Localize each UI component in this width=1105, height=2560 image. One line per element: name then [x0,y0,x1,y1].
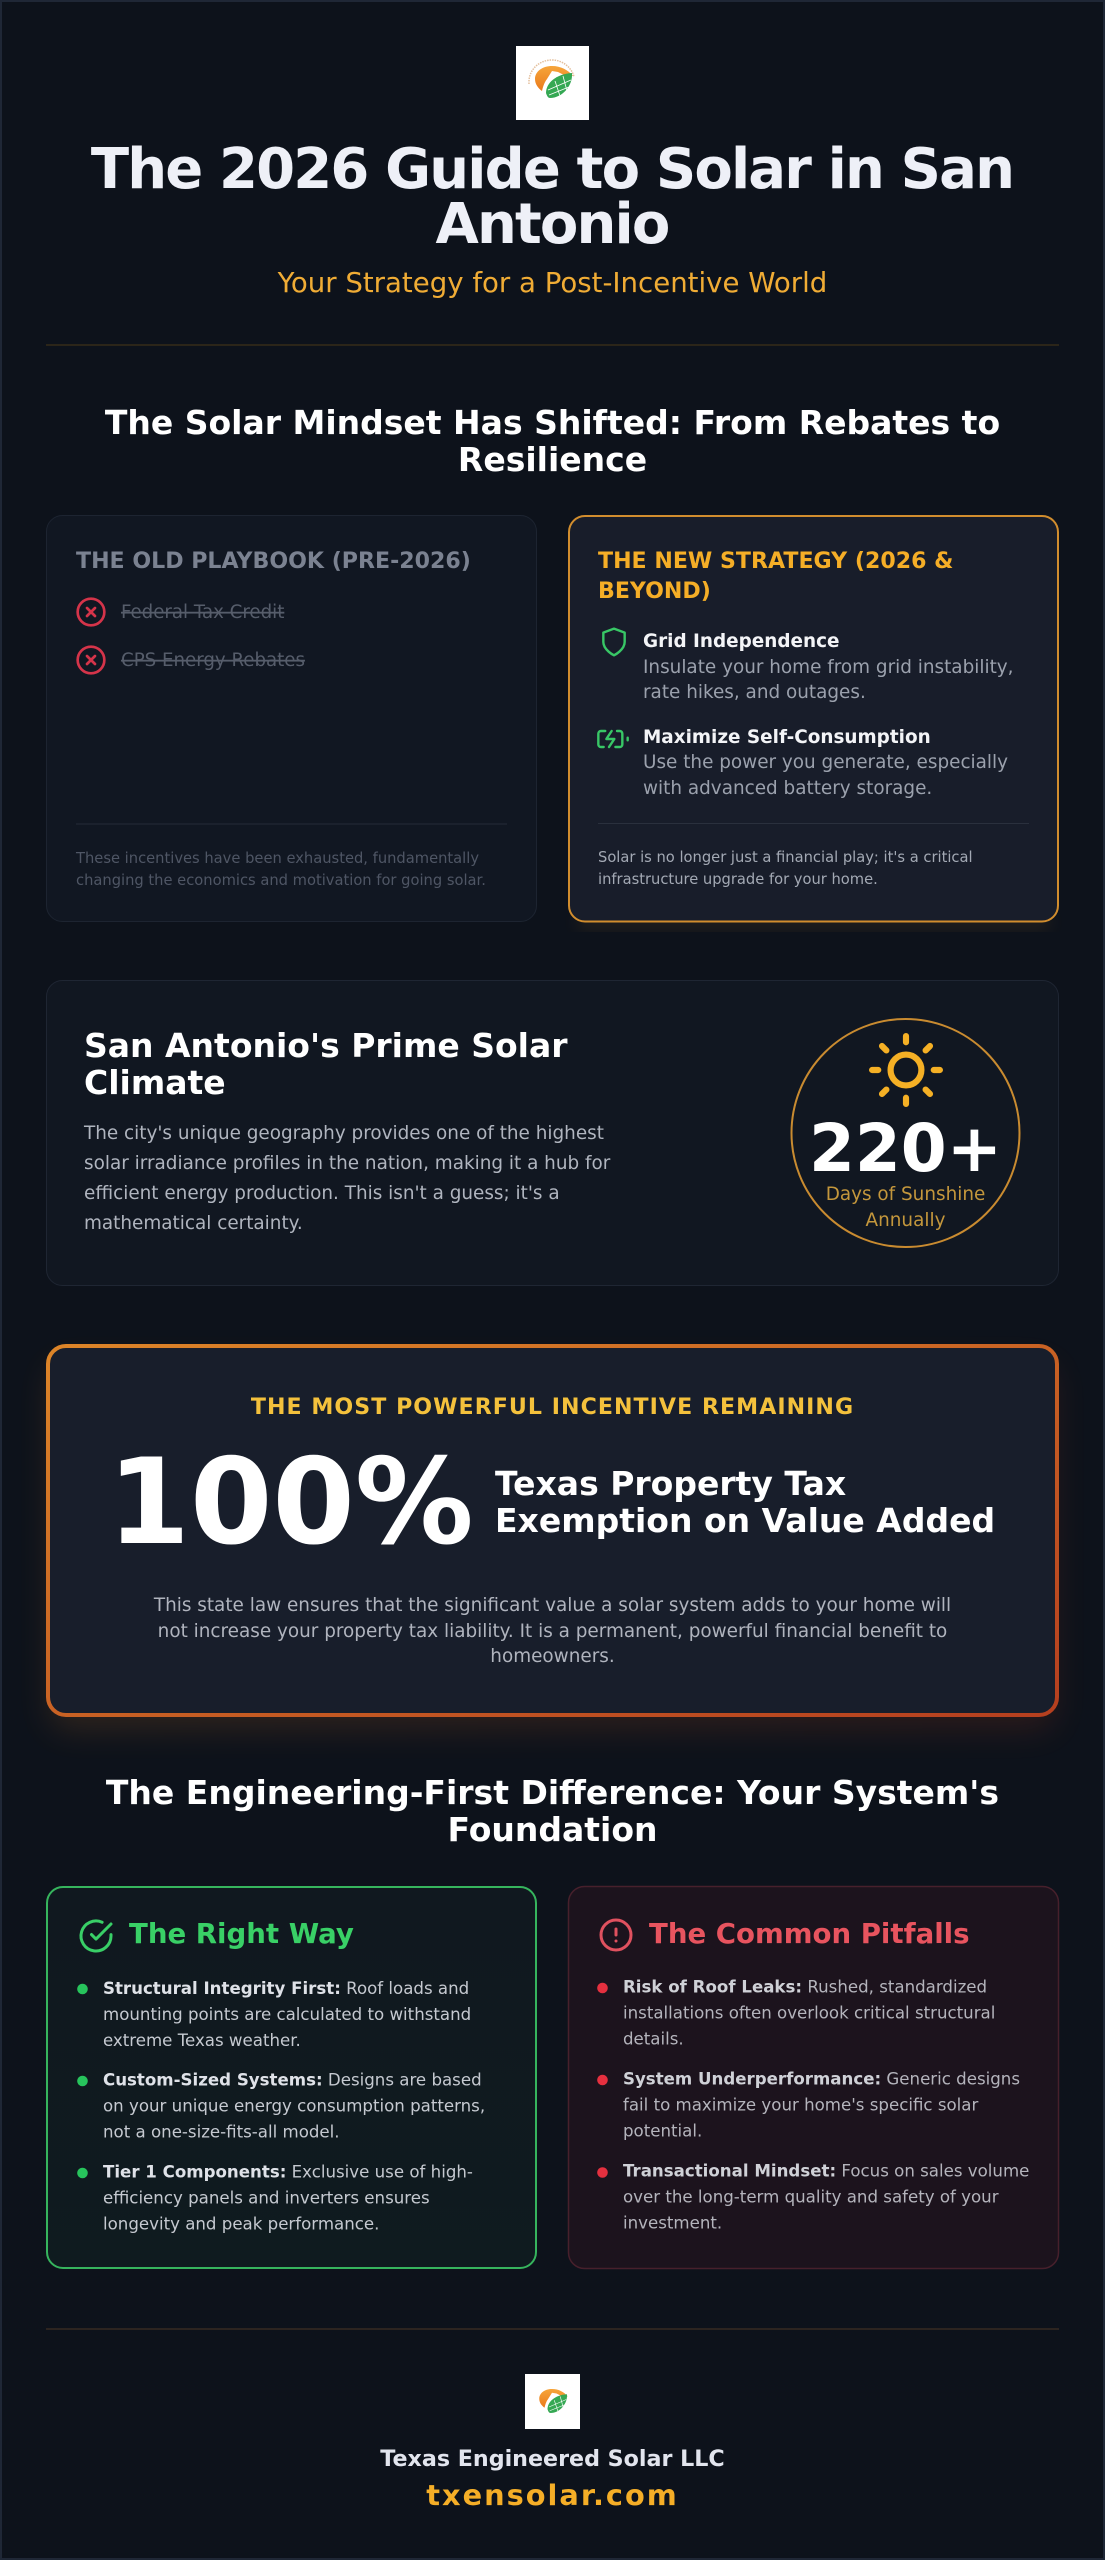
icon: shield [603,629,625,655]
incentive eyebrow: THE MOST POWERFUL INCENTIVE REMAINING [251,1394,854,1420]
new strategy heading [598,548,953,604]
sunshine stat circle [792,1019,1020,1247]
new strategy footnote: Solar is no longer just a financial play; it's a critical [598,849,973,866]
icon: battery charging [598,731,628,747]
self consumption text: with advanced battery storage. [643,778,932,799]
header divider [46,344,1059,346]
bullet: transactional: Transactional Mindset: Focus on sales volume [623,2162,1029,2180]
panel: new strategy [569,516,1058,929]
panel: old playbook [46,516,536,922]
heading: engineering-first [106,1773,999,1849]
right way heading: The Right Way [129,1917,354,1950]
stat number: 220+ [809,1110,1002,1187]
icon: alert circle [601,1920,631,1950]
self consumption text [643,727,1008,799]
self consumption text: Maximize Self-Consumption [643,727,931,748]
logo: header [516,46,589,120]
climate description: The city's unique geography provides one of the highest [83,1123,604,1144]
bullet: transactional: investment. [623,2214,722,2232]
bullet: custom sized: Custom-Sized Systems: Designs are based [103,2070,482,2090]
bullet: transactional: over the long-term quality and safety of your [623,2188,999,2206]
heading: engineering-first: Foundation [447,1810,658,1849]
climate description: mathematical certainty. [84,1213,303,1234]
new strategy footnote: infrastructure upgrade for your home. [598,871,878,888]
exemption text [495,1464,995,1540]
heading: mindset shift [105,403,1000,479]
bullet: custom sized [77,2070,485,2142]
icon: x circle 2 [78,647,104,673]
grid independence text: Insulate your home from grid instability, [643,657,1014,678]
company name: Texas Engineered Solar LLC [380,2446,725,2472]
old item: CPS rebates: CPS Energy Rebates [121,650,305,671]
bullet: tier 1: efficiency panels and inverters ensures [103,2188,430,2208]
bullet: roof leaks [597,1978,995,2048]
climate heading: San Antonio's Prime Solar [84,1026,568,1065]
grid independence text: rate hikes, and outages. [643,682,866,703]
logo: footer [525,2374,580,2429]
grid independence text [643,631,1014,703]
bullet: custom sized: on your unique energy consumption patterns, [103,2096,485,2116]
icon: x circle 1 [78,599,104,625]
bullet: tier 1: Tier 1 Components: Exclusive use of high- [103,2162,473,2182]
incentive description: This state law ensures that the significant value a solar system adds to your home will [153,1595,951,1616]
climate description: solar irradiance profiles in the nation, making it a hub for [84,1153,611,1174]
climate description [83,1123,611,1234]
panel: climate [46,980,1058,1286]
bullet: roof leaks: details. [623,2030,684,2048]
self consumption text: Use the power you generate, especially [643,752,1008,773]
bullet: underperformance: fail to maximize your home's specific solar [623,2096,978,2114]
bullet: tier 1: longevity and peak performance. [103,2214,379,2234]
new strategy footnote [598,849,973,888]
website: txensolar.com [426,2478,679,2512]
bullet: structural integrity: extreme Texas weather. [103,2031,301,2050]
panel: common pitfalls [568,1886,1058,2268]
old playbook heading: THE OLD PLAYBOOK (PRE-2026) [76,548,471,574]
icon: check circle [81,1921,111,1951]
stat label [826,1184,985,1231]
bullet: structural integrity [77,1979,471,2050]
heading: mindset shift: Resilience [458,440,647,479]
bullet: roof leaks: installations often overlook critical structural [623,2004,995,2022]
bullet: underperformance [597,2070,1020,2140]
old playbook footnote: These incentives have been exhausted, fundamentally [75,850,479,867]
stat label: Annually [866,1210,946,1231]
exemption text: Texas Property Tax [495,1464,846,1503]
new strategy heading: BEYOND) [598,578,711,604]
panel: the right way [47,1887,536,2268]
grid independence text: Grid Independence [643,631,839,652]
bullet: underperformance: System Underperformance: Generic designs [623,2070,1020,2088]
old playbook footnote: changing the economics and motivation for going solar. [76,872,486,889]
footer divider [46,2328,1059,2330]
climate heading: Climate [84,1063,226,1102]
incentive description [153,1595,951,1667]
incentive description: homeowners. [490,1646,615,1667]
subtitle: Your Strategy for a Post-Incentive World [277,266,827,299]
panel: property tax incentive [48,1346,1057,1730]
icon: sun [872,1036,940,1104]
heading: engineering-first: The Engineering-First Difference: Your System's [106,1773,999,1812]
title: The 2026 Guide to Solar in San [91,137,1013,202]
bullet: custom sized: not a one-size-fits-all model. [103,2122,340,2142]
exemption text: Exemption on Value Added [495,1501,995,1540]
bullet: underperformance: potential. [623,2122,702,2140]
bullet: structural integrity: mounting points are calculated to withstand [103,2005,471,2024]
incentive description: not increase your property tax liability. It is a permanent, powerful financial benefit to [158,1621,947,1642]
old item: federal tax credit: Federal Tax Credit [121,602,284,623]
old playbook footnote [75,850,486,889]
bullet: transactional [597,2162,1029,2232]
bullet: roof leaks: Risk of Roof Leaks: Rushed, standardized [623,1978,987,1996]
bullet: structural integrity: Structural Integrity First: Roof loads and [103,1979,469,1998]
title: Antonio [435,192,669,257]
bullet: tier 1 [77,2162,473,2234]
climate description: efficient energy production. This isn't a guess; it's a [84,1183,560,1204]
big 100 percent: 100% [108,1433,474,1571]
climate heading [84,1026,568,1102]
stat label: Days of Sunshine [826,1184,985,1205]
new strategy heading: THE NEW STRATEGY (2026 & [598,548,953,574]
title [91,137,1013,257]
pitfalls heading: The Common Pitfalls [649,1917,970,1950]
heading: mindset shift: The Solar Mindset Has Shifted: From Rebates to [105,403,1000,442]
